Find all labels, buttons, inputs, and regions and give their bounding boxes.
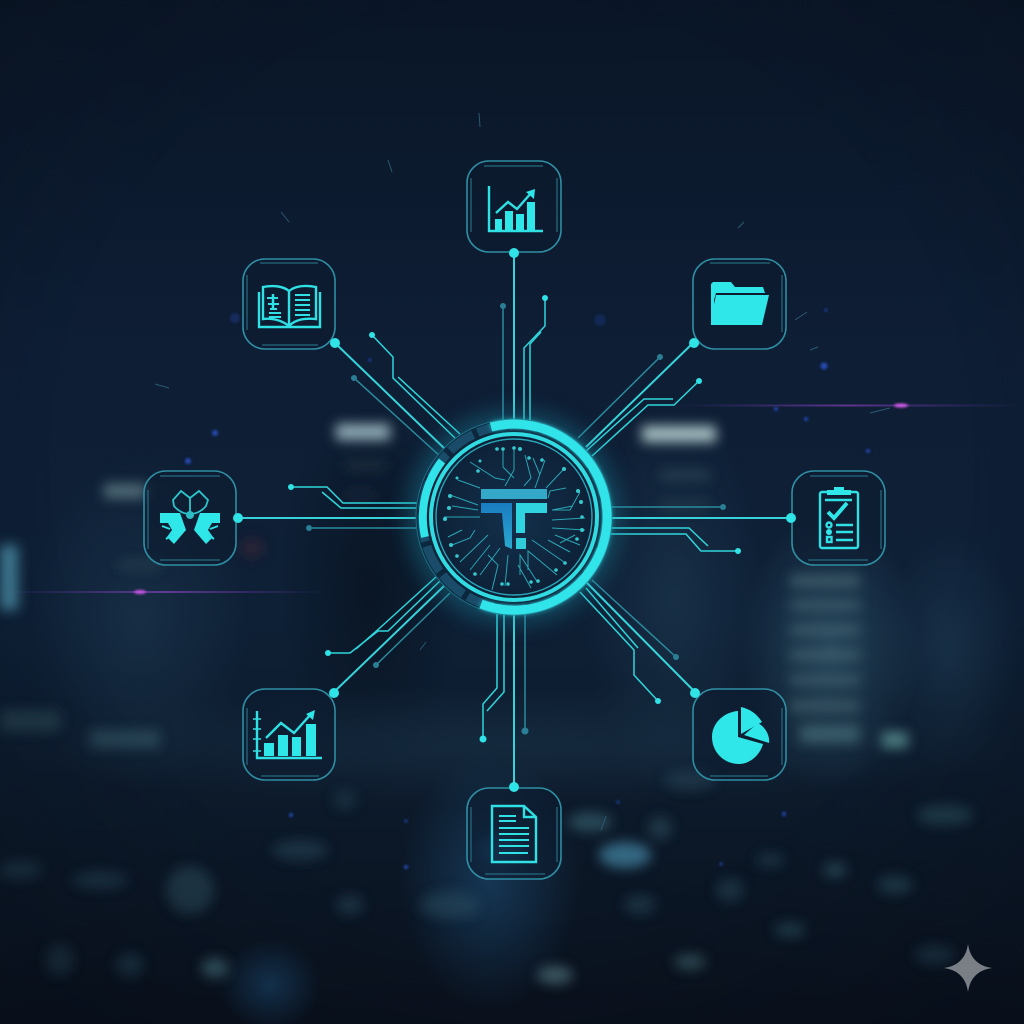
node: document	[467, 782, 561, 879]
blurred city skyline	[0, 400, 1024, 1024]
central hub	[406, 409, 622, 625]
watermark sparkle	[944, 944, 992, 992]
connector: lower right	[580, 580, 695, 704]
node: bar chart	[243, 688, 339, 780]
hub inner circuit traces	[443, 446, 585, 590]
icon: folder	[711, 282, 769, 325]
particles and light flares	[0, 113, 1024, 869]
node: anatomy and arrows	[144, 471, 243, 565]
icon: open book	[259, 286, 320, 327]
connector: top	[500, 253, 548, 420]
node: checklist	[786, 471, 885, 565]
node: folder	[689, 259, 786, 349]
connector: right	[611, 504, 790, 554]
connector: left	[238, 484, 417, 531]
icon: pie chart	[712, 707, 769, 764]
icon: growth chart	[489, 186, 543, 231]
icon: brain with chevrons	[160, 491, 220, 544]
node: top growth chart	[467, 161, 561, 258]
connector: lower left	[325, 577, 450, 692]
T logo	[481, 489, 547, 549]
connector: upper left	[335, 332, 460, 457]
hub glowing arcs	[423, 424, 607, 610]
icon: bar chart with arrow	[253, 710, 322, 758]
node: book	[243, 259, 340, 349]
icon: document	[492, 806, 536, 862]
connector: bottom	[480, 613, 528, 787]
node: pie chart	[690, 688, 786, 780]
icon: clipboard	[820, 487, 858, 548]
connector: upper right	[578, 343, 702, 456]
